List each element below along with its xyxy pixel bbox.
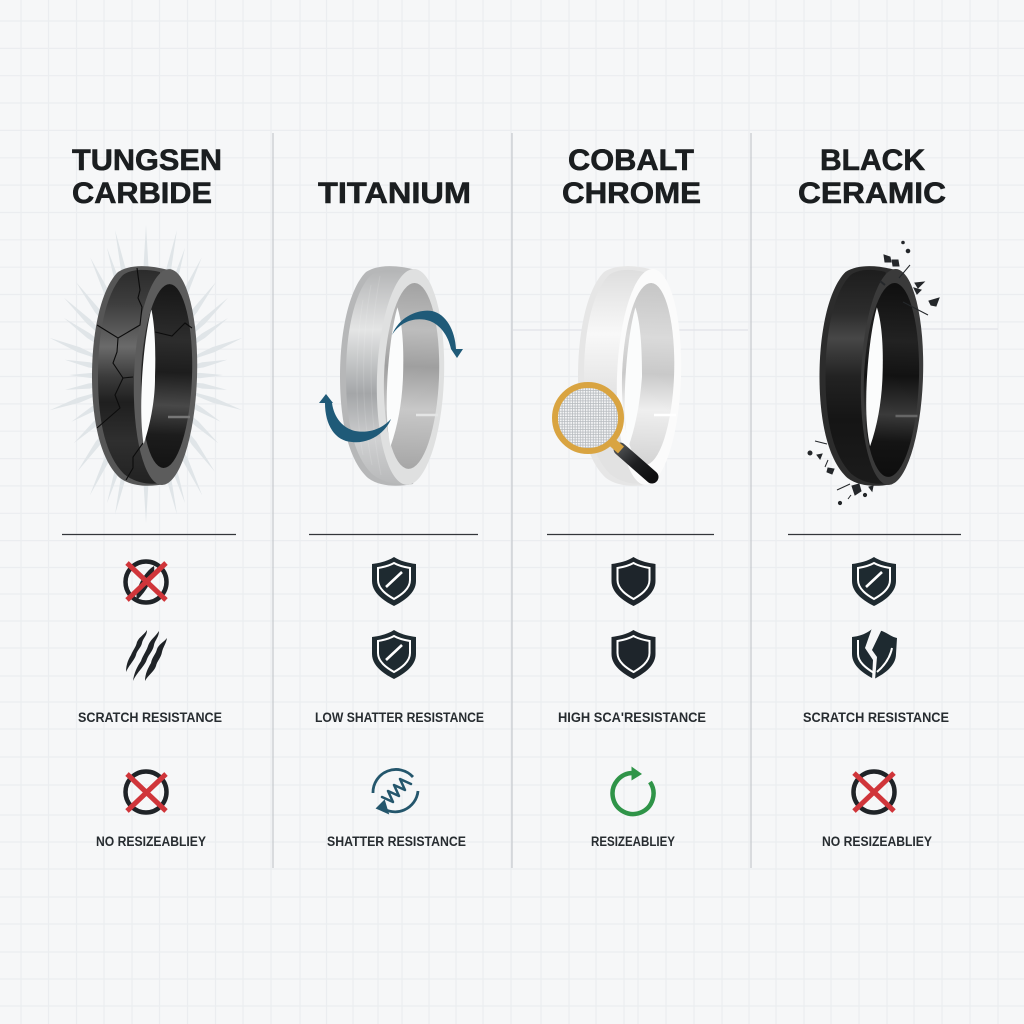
heading: black ceramic [798,144,946,210]
heading: tungsten carbide [72,144,222,210]
panel: cobalt chrome [547,144,714,849]
ring: white cobalt chrome [578,266,685,486]
label: shatter resistance: SHATTER RESISTANCE [327,834,466,849]
label: no resizeability: NO RESIZEABLIEY [822,834,932,849]
icon: green resize arrow [613,766,654,814]
icon: solid shield [612,557,656,606]
icon: magnifying glass [555,385,652,477]
panel: black ceramic [788,144,961,849]
label: low shatter resistance: LOW SHATTER RESISTANCE [315,710,484,725]
icon: no resize [126,772,166,812]
icon: radiating starburst [49,225,243,523]
heading: black ceramic: BLACK [820,144,925,177]
ring: cracked tungsten carbide [92,266,201,486]
icon: ceramic shards lower left [808,441,873,505]
ring: brushed titanium [340,266,448,486]
icon: shield with slash [852,557,896,606]
icon: spring with rotating arrows [373,769,418,812]
divider line [309,534,478,536]
heading: cobalt chrome: CHROME [562,177,701,210]
icon: shield with slash [372,557,416,606]
icon: broken shield [852,628,897,680]
column dividers [273,133,751,868]
divider line [788,534,961,536]
arrow: rotation clockwise lower [319,394,391,442]
heading: cobalt chrome [562,144,701,210]
panel: tungsten carbide [49,144,243,849]
heading: tungsten carbide: TUNGSEN [72,144,222,177]
divider line [62,534,236,536]
heading: tungsten carbide: CARBIDE [72,177,212,210]
heading: cobalt chrome: COBALT [568,144,694,177]
icon: crossed out scratch [126,562,166,602]
label: scratch resistance: SCRATCH RESISTANCE [803,710,949,725]
icon: ceramic shards upper right [880,241,939,315]
icon: solid shield [612,630,656,679]
panel: titanium [309,177,484,849]
icon: shield with slash [372,630,416,679]
label: resizeability: RESIZEABLIEY [591,834,675,849]
label: no resizeability: NO RESIZEABLIEY [96,834,206,849]
ring: black ceramic [820,266,927,486]
label: scratch resistance: SCRATCH RESISTANCE [78,710,222,725]
heading: titanium: TITANIUM [318,177,471,210]
icon: claw scratches [126,630,167,681]
heading: black ceramic: CERAMIC [798,177,946,210]
arrow: rotation clockwise upper [392,311,463,358]
divider line [547,534,714,536]
cracks [97,268,192,480]
label: high scratch resistance: HIGH SCA'RESISTANCE [558,710,706,725]
icon: no resize [854,772,894,812]
